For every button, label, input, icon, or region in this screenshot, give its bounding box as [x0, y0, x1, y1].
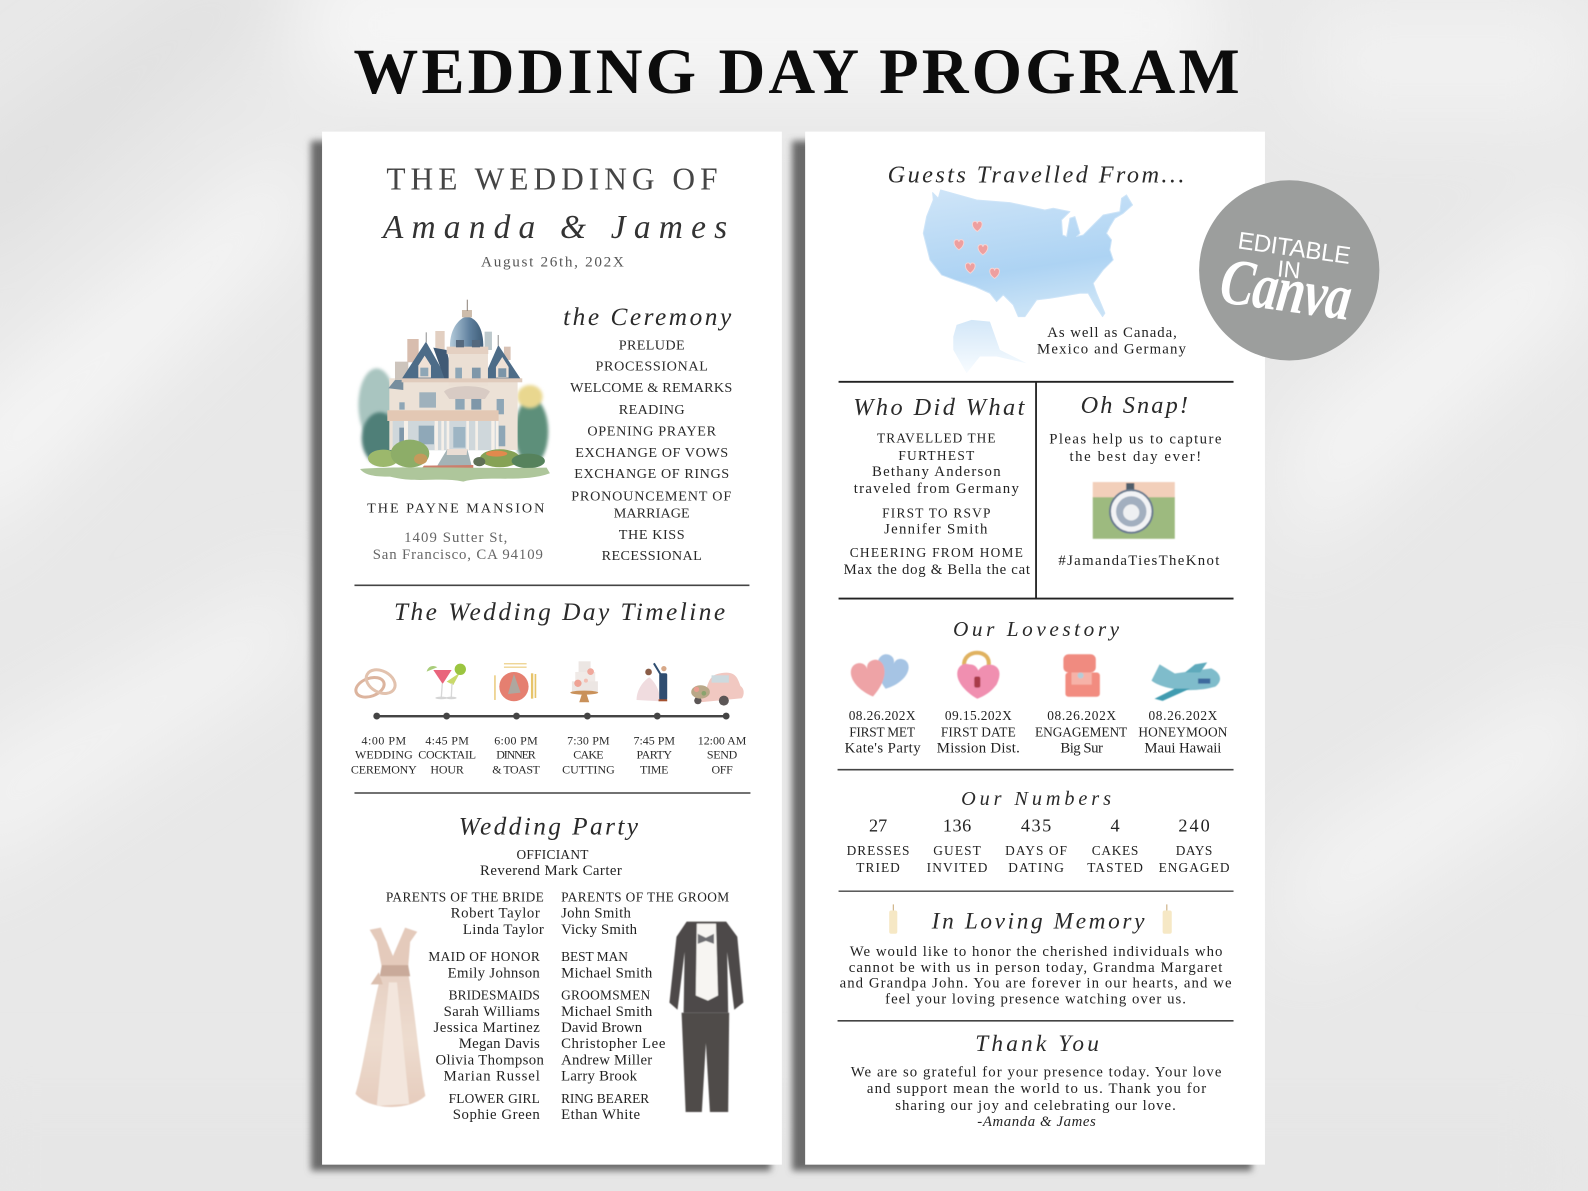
illustration: watercolor mansion — [358, 300, 550, 482]
statistics row: 136 — [943, 815, 971, 835]
heading: thank you: Thank You — [975, 1031, 1099, 1057]
timeline labels — [351, 733, 747, 777]
heading: wedding party: Wedding Party — [459, 813, 639, 841]
timeline labels: HOUR — [430, 763, 464, 777]
lovestory captions: ENGAGEMENT — [1035, 724, 1127, 739]
icon: right candle — [1163, 904, 1172, 934]
text: who did what: TRAVELLED THE — [877, 431, 996, 446]
officiant: Reverend Mark Carter — [480, 863, 622, 879]
venue name and address: THE PAYNE MANSION — [367, 500, 544, 516]
list: ceremony order: PROCESSIONAL — [595, 359, 708, 375]
timeline labels: 4:00 PM — [362, 733, 406, 747]
list: bride side party: Olivia Thompson — [435, 1052, 544, 1068]
list: groom side party: Larry Brook — [561, 1069, 638, 1085]
list: ceremony order: READING — [619, 402, 685, 418]
text: who did what: traveled from Germany — [854, 481, 1019, 497]
badge: editable in canva: Canva — [1216, 244, 1356, 335]
map note: Mexico and Germany — [1037, 341, 1187, 357]
statistics row: DAYS — [1176, 843, 1212, 858]
lovestory captions: 08.26.202X — [1047, 708, 1116, 723]
list: bride side party: Megan Davis — [459, 1036, 540, 1052]
badge: editable in canva: IN — [1276, 255, 1302, 284]
text: memorial message: feel your loving presence watching over us. — [885, 992, 1186, 1008]
list: bride side party: BRIDESMAIDS — [449, 988, 540, 1003]
lovestory captions: Maui Hawaii — [1144, 740, 1221, 756]
heading: oh snap: Oh Snap! — [1081, 392, 1188, 419]
icon: left candle — [889, 904, 897, 934]
icon: camera — [1093, 482, 1175, 539]
hashtag: #JamandaTiesTheKnot — [1058, 553, 1220, 569]
list: bride side party: Marian Russel — [444, 1069, 540, 1085]
list: groom side party: David Brown — [561, 1020, 643, 1036]
list: ceremony order: PRONOUNCEMENT OF — [571, 488, 731, 504]
timeline labels: WEDDING — [355, 748, 413, 762]
panel: right program card — [792, 132, 1265, 1171]
list: ceremony order — [570, 337, 732, 564]
text: thank you message: -Amanda & James — [977, 1114, 1096, 1130]
list: bride side party — [386, 889, 544, 1123]
text: memorial message: and Grandpa John. You are forever in our hearts, and we — [840, 975, 1232, 991]
venue name and address: San Francisco, CA 94109 — [373, 547, 543, 563]
timeline labels: COCKTAIL — [418, 748, 476, 762]
icon: heart padlock — [957, 653, 1000, 699]
statistics row: TASTED — [1087, 860, 1143, 875]
list: bride side party: Emily Johnson — [448, 965, 540, 981]
statistics row: DRESSES — [847, 843, 909, 858]
heading: in loving memory: In Loving Memory — [931, 909, 1145, 935]
venue name and address: 1409 Sutter St, — [404, 530, 507, 546]
timeline labels: & TOAST — [492, 763, 541, 777]
text: who did what: Jennifer Smith — [884, 522, 988, 538]
text: thank you message: We are so grateful for your presence today. Your love — [851, 1065, 1222, 1081]
list: groom side party: Christopher Lee — [561, 1036, 666, 1052]
list: ceremony order: OPENING PRAYER — [587, 423, 717, 439]
list: ceremony order: WELCOME & REMARKS — [570, 380, 732, 396]
heading: wedding day timeline: The Wedding Day Timeline — [394, 598, 725, 626]
statistics row: 240 — [1178, 815, 1210, 835]
map note — [1037, 325, 1187, 357]
map: united states with hearts — [923, 190, 1133, 373]
timeline labels: DINNER — [496, 748, 536, 762]
lovestory captions: FIRST MET — [849, 724, 915, 739]
list: ceremony order: PRELUDE — [619, 337, 685, 353]
list: groom side party: PARENTS OF THE GROOM — [561, 889, 729, 904]
panel: left program card — [311, 132, 782, 1171]
statistics row: ENGAGED — [1159, 860, 1230, 875]
lovestory captions: FIRST DATE — [941, 724, 1016, 739]
timeline icons — [353, 661, 744, 706]
list: bride side party: Jessica Martinez — [433, 1020, 540, 1036]
timeline labels: CEREMONY — [351, 763, 417, 777]
list: groom side party: Michael Smith — [561, 965, 653, 981]
list: groom side party: Ethan White — [561, 1107, 640, 1123]
lovestory captions: 08.26.202X — [1148, 708, 1218, 723]
heading: the wedding of: Amanda & James — [381, 209, 727, 246]
map note: As well as Canada, — [1047, 325, 1177, 341]
heading: our lovestory: Our Lovestory — [953, 617, 1120, 641]
statistics row: DATING — [1008, 860, 1064, 875]
list: ceremony order: EXCHANGE OF VOWS — [575, 445, 728, 461]
list: bride side party: MAID OF HONOR — [428, 949, 540, 964]
timeline labels: PARTY — [637, 748, 672, 762]
list: ceremony order: RECESSIONAL — [602, 548, 702, 564]
lovestory captions: Big Sur — [1060, 740, 1103, 756]
heading: the wedding of: August 26th, 202X — [481, 253, 624, 270]
title: WEDDING DAY PROGRAM — [353, 36, 1240, 108]
lovestory captions — [845, 708, 1228, 756]
lovestory captions: Kate's Party — [845, 740, 921, 756]
timeline labels: OFF — [711, 763, 733, 777]
badge: editable in canva: EDITABLE — [1236, 227, 1352, 270]
heading: guests travelled from: Guests Travelled From... — [888, 161, 1184, 188]
text: who did what: Max the dog & Bella the cat — [844, 562, 1031, 578]
timeline labels: 7:30 PM — [567, 733, 610, 747]
list: bride side party: Robert Taylor — [451, 906, 540, 922]
list: groom side party: RING BEARER — [561, 1091, 649, 1106]
timeline labels: 6:00 PM — [494, 733, 538, 747]
timeline labels: 7:45 PM — [633, 733, 675, 747]
text: memorial message: We would like to honor the cherished individuals who — [850, 944, 1222, 960]
list: groom side party: Andrew Miller — [561, 1052, 652, 1068]
icon: wedding rings — [353, 665, 399, 701]
list: bride side party: Linda Taylor — [463, 922, 544, 938]
timeline labels: 12:00 AM — [698, 733, 747, 747]
text: thank you message — [851, 1065, 1222, 1130]
list: ceremony order: THE KISS — [619, 527, 685, 543]
heading: the wedding of: THE WEDDING OF — [386, 161, 718, 196]
illustration: groom tuxedo — [669, 922, 743, 1112]
timeline labels: CAKE — [573, 748, 604, 762]
statistics row: INVITED — [927, 860, 988, 875]
text: memorial message: cannot be with us in person today, Grandma Margaret — [849, 960, 1223, 976]
list: groom side party: GROOMSMEN — [561, 988, 651, 1003]
text: memorial message — [840, 944, 1232, 1008]
text: who did what — [844, 431, 1031, 578]
icon: cocktails — [427, 664, 466, 699]
heading: the wedding of — [381, 161, 727, 270]
statistics row: 435 — [1021, 815, 1051, 835]
icon: vintage car — [691, 673, 744, 706]
list: bride side party: Sarah Williams — [444, 1004, 540, 1020]
statistics row — [847, 815, 1230, 875]
list: groom side party: BEST MAN — [561, 949, 628, 964]
icon: wedding cake — [570, 661, 598, 702]
icon: dinner plate — [494, 663, 536, 701]
heading: our numbers: Our Numbers — [961, 788, 1111, 810]
timeline labels: SEND — [707, 748, 738, 762]
illustration: wedding dress — [355, 928, 425, 1107]
list: bride side party: FLOWER GIRL — [449, 1091, 540, 1106]
icon: dancing couple — [637, 663, 667, 701]
text: oh snap — [1049, 432, 1222, 465]
text: thank you message: sharing our joy and celebrating our love. — [895, 1098, 1176, 1114]
list: bride side party: PARENTS OF THE BRIDE — [386, 889, 544, 904]
heading: the ceremony: the Ceremony — [563, 303, 732, 331]
list: bride side party: Sophie Green — [453, 1107, 540, 1123]
list: groom side party: Michael Smith — [561, 1004, 653, 1020]
lovestory captions: 09.15.202X — [945, 708, 1012, 723]
timeline labels: CUTTING — [562, 763, 615, 777]
list: ceremony order: MARRIAGE — [614, 506, 690, 522]
list: groom side party: John Smith — [561, 906, 632, 922]
lovestory captions: HONEYMOON — [1138, 724, 1228, 739]
statistics row: CAKES — [1092, 843, 1138, 858]
icon: two hearts — [849, 652, 911, 700]
lovestory captions: Mission Dist. — [937, 740, 1020, 756]
badge: editable in canva — [1199, 180, 1379, 361]
icon: ring box — [1063, 654, 1100, 697]
timeline labels: 4:45 PM — [425, 733, 469, 747]
list: groom side party — [561, 889, 729, 1123]
text: who did what: FIRST TO RSVP — [882, 506, 990, 521]
list: ceremony order: EXCHANGE OF RINGS — [574, 466, 729, 482]
timeline axis with dots — [373, 713, 730, 719]
statistics row: 4 — [1110, 815, 1120, 835]
officiant — [480, 847, 622, 879]
text: who did what: Bethany Anderson — [872, 464, 1001, 480]
venue name and address — [367, 500, 544, 563]
text: oh snap: Pleas help us to capture — [1049, 432, 1222, 448]
statistics row: DAYS OF — [1005, 843, 1067, 858]
text: who did what: FURTHEST — [898, 448, 974, 463]
icon: airplane — [1152, 662, 1220, 701]
text: who did what: CHEERING FROM HOME — [850, 545, 1023, 560]
statistics row: GUEST — [933, 843, 981, 858]
text: thank you message: and support mean the world to us. Thank you for — [867, 1081, 1206, 1097]
statistics row: 27 — [869, 815, 887, 835]
text: oh snap: the best day ever! — [1069, 449, 1201, 465]
officiant: OFFICIANT — [517, 847, 588, 862]
lovestory captions: 08.26.202X — [849, 708, 916, 723]
lovestory icons — [849, 652, 1220, 701]
timeline labels: TIME — [640, 763, 668, 777]
statistics row: TRIED — [856, 860, 900, 875]
heading: who did what: Who Did What — [853, 394, 1026, 421]
list: groom side party: Vicky Smith — [561, 922, 638, 938]
